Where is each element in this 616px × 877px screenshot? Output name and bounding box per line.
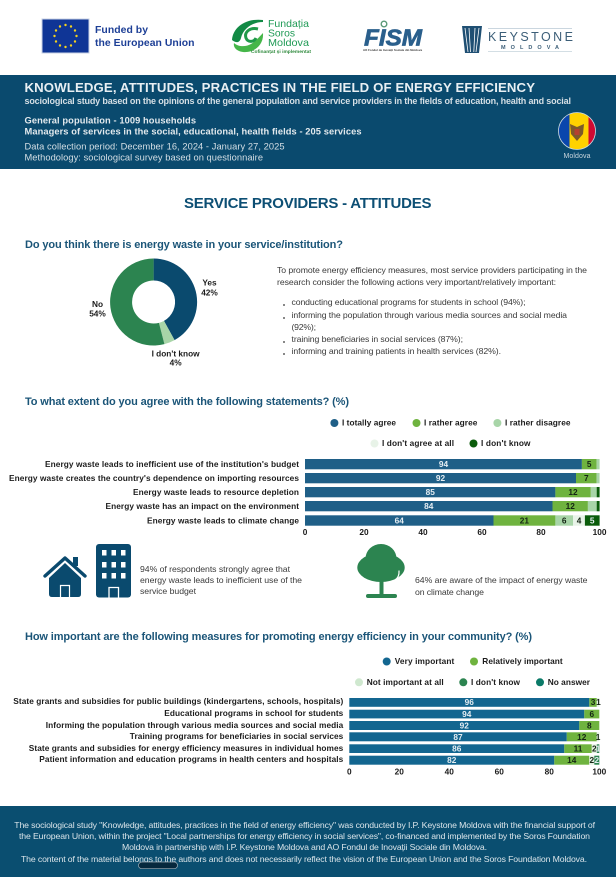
stacked bar chart: agreement — [9, 459, 607, 537]
row: home grants: 11 — [574, 744, 583, 754]
logo: Keystone Moldova: KEYSTONE — [488, 30, 573, 44]
text block: promotion measures: (92%); — [292, 322, 316, 332]
axis: 80 — [545, 766, 554, 776]
axis: 100 — [592, 766, 607, 776]
legend: importance chart: Very important — [395, 656, 455, 666]
heading: importance question: How important are the following measures for promoting energy efficiency in your community? (%) — [25, 631, 532, 643]
text: climate finding — [415, 575, 588, 597]
sample description — [24, 116, 362, 137]
donut chart: energy waste: No — [92, 299, 103, 309]
row: climate change — [147, 515, 600, 526]
pill overlay — [138, 862, 178, 869]
row: inefficient budget: 94 — [439, 459, 448, 469]
text block: promotion measures: conducting educational programs for students in school (94%); — [292, 297, 526, 307]
row: public building grants — [13, 696, 601, 707]
row: patient education: 2 — [589, 755, 594, 765]
row: environment: 84 — [424, 501, 434, 511]
row: media: 8 — [587, 720, 592, 730]
row: media: Informing the population through various media sources and social media — [46, 720, 344, 730]
row: home grants: 1 — [596, 744, 601, 754]
axis: 60 — [477, 527, 487, 537]
text block: promotion measures — [277, 265, 587, 356]
icon: Moldova flag — [558, 112, 596, 160]
row: climate change: 5 — [590, 516, 595, 526]
footer text: Moldova in partnership with I.P. Keystone Moldova and AO Fondul de Inovații Sociale din Moldova. — [122, 842, 487, 852]
text: budget finding: energy waste leads to inefficient use of the — [140, 575, 302, 585]
axis: 80 — [536, 527, 546, 537]
methodology text: Methodology: sociological survey based on questionnaire — [24, 153, 263, 163]
icon: tree — [357, 544, 405, 598]
donut chart: energy waste: 54% — [89, 309, 106, 319]
logo: Fundatia Soros Moldova: Cofinanțat și implementat — [251, 49, 311, 55]
axis: 40 — [418, 527, 428, 537]
row: climate change: 21 — [520, 516, 529, 526]
row: resource depletion: 85 — [426, 487, 435, 497]
subtitle: sociological study based on the opinions of the general population and service providers in the fields of education, health and social — [24, 96, 571, 106]
row: resource depletion — [133, 487, 600, 497]
donut chart: energy waste — [89, 258, 218, 368]
row: public building grants: 3 — [591, 697, 596, 707]
legend: importance chart: Not important at all — [367, 677, 444, 687]
axis: 0 — [303, 527, 308, 537]
axis: 20 — [395, 766, 404, 776]
icon: office building — [96, 544, 131, 598]
row: school programs — [164, 708, 599, 719]
methodology text — [24, 142, 284, 163]
row: training beneficiaries: Training programs for beneficiaries in social services — [130, 731, 344, 741]
text block: promotion measures: research consider the following actions very important/relatively important: — [277, 277, 556, 287]
row: training beneficiaries — [130, 731, 601, 742]
row: inefficient budget: Energy waste leads to inefficient use of the institution's budget — [45, 459, 299, 469]
text: climate finding: 64% are aware of the impact of energy waste — [415, 575, 588, 585]
row: climate change: 6 — [562, 516, 567, 526]
row: public building grants: State grants and subsidies for public buildings (kindergartens, schools, hospitals) — [13, 696, 344, 706]
icon: Moldova flag: Moldova — [564, 153, 591, 160]
donut chart: energy waste: 4% — [170, 358, 182, 368]
header band — [0, 75, 616, 169]
legend: importance chart — [355, 656, 591, 687]
text: budget finding: 94% of respondents strongly agree that — [140, 564, 291, 574]
row: resource depletion: 12 — [568, 487, 578, 497]
row: patient education: 2 — [594, 755, 599, 765]
row: import dependence: 7 — [584, 473, 589, 483]
row: environment: Energy waste has an impact on the environment — [106, 501, 299, 511]
logo: Fundatia Soros Moldova: Fundația — [268, 18, 309, 30]
row: school programs: 94 — [462, 709, 472, 719]
methodology text: Data collection period: December 16, 2024 - January 27, 2025 — [24, 142, 284, 152]
row: climate change: 64 — [395, 516, 404, 526]
legend: agreement chart — [330, 418, 571, 448]
row: inefficient budget — [45, 459, 600, 469]
axis: 40 — [445, 766, 454, 776]
legend: agreement chart: I rather agree — [424, 418, 478, 428]
row: resource depletion: Energy waste leads to resource depletion — [133, 487, 299, 497]
text: budget finding: service budget — [140, 586, 197, 596]
sample description: Managers of services in the social, educational, health fields - 205 services — [24, 127, 362, 137]
axis — [347, 766, 607, 776]
legend: agreement chart: I don't know — [481, 438, 531, 448]
logo: FISM: FISM — [364, 24, 423, 50]
row: patient education: 82 — [447, 755, 457, 765]
row: home grants: State grants and subsidies for energy efficiency measures in individual homes — [29, 743, 344, 753]
row: training beneficiaries: 12 — [577, 732, 587, 742]
row: school programs: 6 — [589, 709, 594, 719]
text block: promotion measures: informing the population through various media sources and social media — [292, 310, 567, 320]
heading: agreement question: To what extent do you agree with the following statements? (%) — [25, 396, 349, 408]
row: media: 92 — [460, 720, 469, 730]
axis — [303, 527, 607, 537]
footer text: The sociological study "Knowledge, attitudes, practices in the field of energy efficiency" was conducted by I.P. Keystone Moldova with the financial support of — [14, 820, 596, 830]
legend: agreement chart: I don't agree at all — [382, 438, 454, 448]
row: import dependence: 92 — [436, 473, 445, 483]
heading: energy waste question: Do you think there is energy waste in your service/institution? — [25, 239, 343, 251]
row: import dependence — [9, 473, 600, 483]
row: training beneficiaries: 87 — [453, 732, 463, 742]
donut chart: energy waste: 42% — [201, 288, 218, 298]
axis: 0 — [347, 766, 352, 776]
footer text: the European Union, within the project "Local partnerships for energy efficiency in social services", co-financed and implemented by the Soros Foundation — [19, 831, 590, 841]
logo: FISM: AO Fondul de Inovații Sociale din Moldova — [363, 48, 422, 52]
row: home grants: 86 — [452, 744, 462, 754]
row: climate change: 4 — [577, 516, 582, 526]
legend: agreement chart: I rather disagree — [505, 418, 571, 428]
axis: 100 — [593, 527, 607, 537]
legend: agreement chart: I totally agree — [342, 418, 396, 428]
row: public building grants: 1 — [596, 697, 601, 707]
row: import dependence: Energy waste creates the country's dependence on importing resources — [9, 473, 299, 483]
row: patient education: 14 — [567, 755, 577, 765]
axis: 60 — [495, 766, 504, 776]
row: climate change: Energy waste leads to climate change — [147, 516, 299, 526]
row: media — [46, 720, 599, 730]
row: patient education — [39, 754, 599, 765]
text block: promotion measures: informing and training patients in health services (82%). — [292, 346, 501, 356]
row: school programs: Educational programs in school for students — [164, 708, 344, 718]
row: environment — [106, 501, 600, 511]
footer band — [0, 806, 616, 877]
logo: Funded by the European Union: the European Union — [95, 38, 194, 49]
row: inefficient budget: 5 — [587, 459, 592, 469]
logo: Funded by the European Union: Funded by — [95, 25, 148, 36]
legend: importance chart: No answer — [548, 677, 591, 687]
logo: Keystone Moldova — [462, 26, 573, 53]
donut chart: energy waste: Yes — [202, 278, 217, 288]
logo: Keystone Moldova: MOLDOVA — [501, 45, 559, 51]
logo: Fundatia Soros Moldova: Soros — [268, 28, 295, 40]
row: patient education: Patient information and education programs in health centers and hospitals — [39, 754, 344, 764]
icon: house — [45, 557, 85, 597]
text block: promotion measures: To promote energy efficiency measures, most service providers participating in the — [277, 265, 587, 275]
main heading: SERVICE PROVIDERS - ATTITUDES — [184, 195, 432, 212]
row: environment: 12 — [566, 501, 575, 511]
axis: 20 — [359, 527, 369, 537]
text: climate finding: on climate change — [415, 587, 484, 597]
sample description: General population - 1009 households — [24, 116, 196, 126]
footer text: The content of the material belongs to the authors and does not necessarily reflect the vision of the European Union and the Soros Foundation Moldova. — [21, 854, 587, 864]
logo: Fundatia Soros Moldova: Moldova — [268, 37, 309, 49]
row: home grants — [29, 743, 601, 754]
row: training beneficiaries: 1 — [596, 732, 601, 742]
title: KNOWLEDGE, ATTITUDES, PRACTICES IN THE FIELD OF ENERGY EFFICIENCY — [24, 80, 535, 95]
logo: Fundatia Soros Moldova — [232, 18, 311, 55]
donut chart: energy waste: I don't know — [152, 349, 200, 359]
row: home grants: 2 — [592, 744, 597, 754]
footer text — [14, 820, 596, 864]
text block: promotion measures: training beneficiaries in social services (87%); — [292, 334, 463, 344]
legend: importance chart: Relatively important — [482, 656, 563, 666]
stacked bar chart: importance — [13, 696, 607, 776]
logo: Funded by the European Union — [42, 19, 194, 53]
text: budget finding — [140, 564, 302, 596]
row: public building grants: 96 — [465, 697, 474, 707]
legend: importance chart: I don't know — [471, 677, 521, 687]
